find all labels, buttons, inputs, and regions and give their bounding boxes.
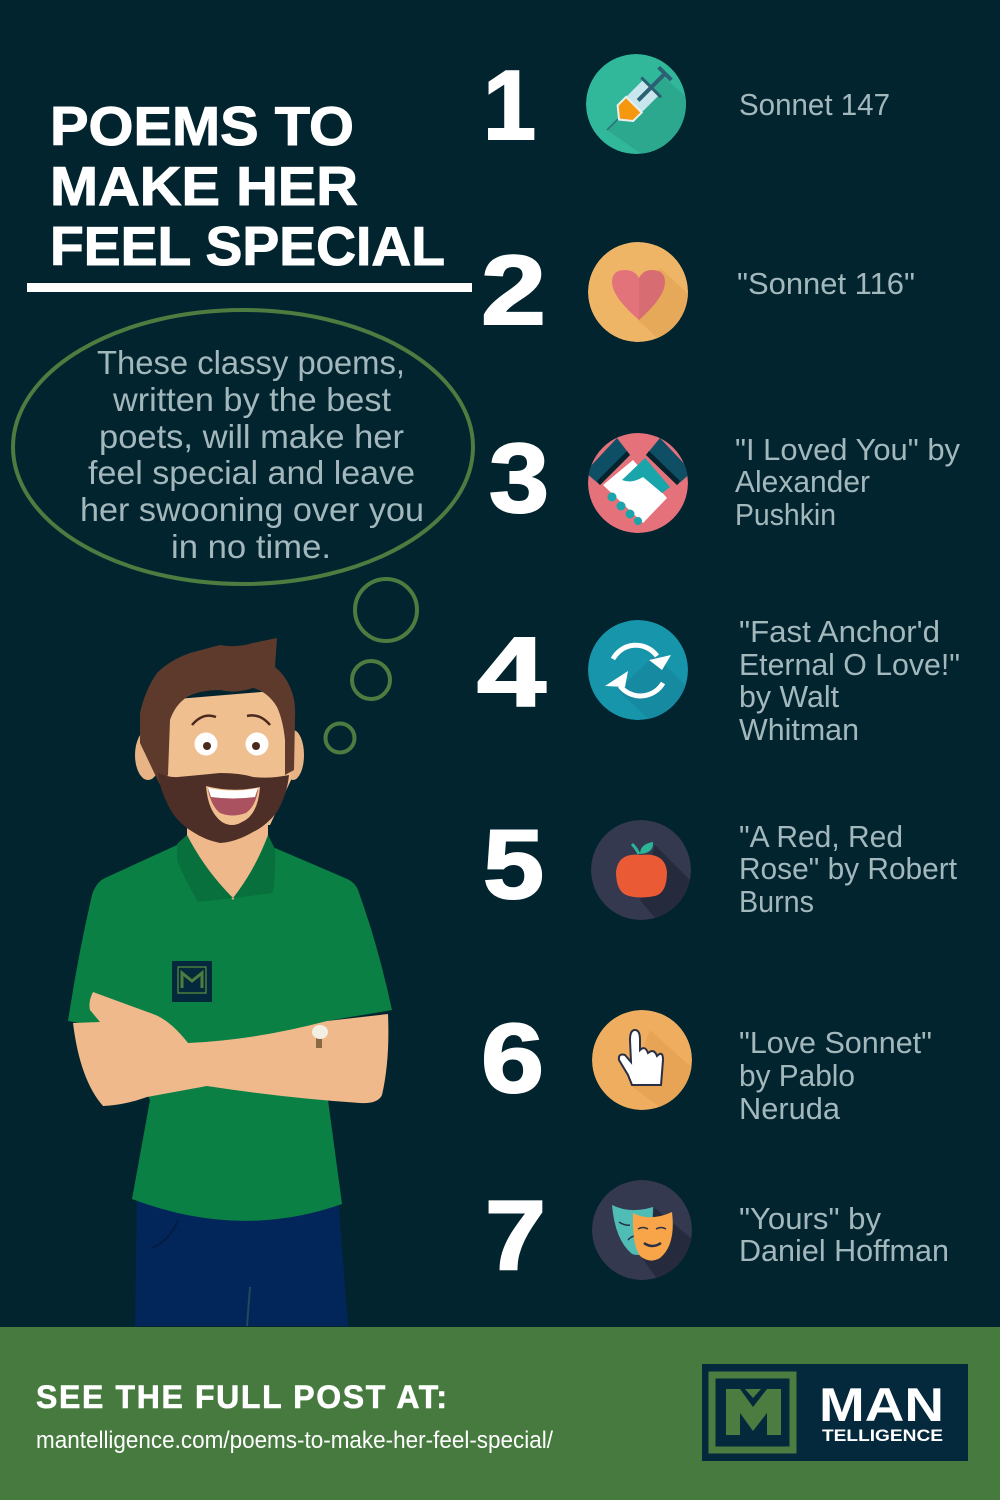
label 7: Daniel Hoffman <box>739 1233 949 1268</box>
title: POEMS TO <box>50 95 354 157</box>
number 4: 4 <box>477 617 546 727</box>
footer heading: SEE THE FULL POST AT: <box>36 1379 447 1415</box>
trousers <box>135 1195 348 1326</box>
logo wordmark: TELLIGENCE <box>822 1427 943 1445</box>
label 3: "I Loved You" by <box>735 432 960 467</box>
bubble text <box>80 344 424 565</box>
number 1: 1 <box>483 50 536 160</box>
label 4 <box>739 614 960 747</box>
mouth <box>206 786 260 825</box>
title: FEEL SPECIAL <box>50 215 445 277</box>
face <box>160 690 291 825</box>
character: bearded man in green polo <box>68 638 392 1326</box>
polo shirt <box>68 845 392 1221</box>
icon: syringe <box>586 54 686 154</box>
neck <box>187 815 268 900</box>
icon: sync arrows <box>588 620 688 720</box>
thought bubble <box>13 310 473 752</box>
label 3: Alexander <box>735 464 870 499</box>
bubble text: in no time. <box>171 528 331 565</box>
label 3: Pushkin <box>735 497 836 532</box>
crossed arms <box>73 992 388 1106</box>
shirt badge <box>172 961 212 1002</box>
bubble text: These classy poems, <box>97 344 405 381</box>
logo mark <box>712 1375 793 1450</box>
label 6: Neruda <box>739 1091 841 1126</box>
title: MAKE HER <box>50 155 358 217</box>
label 7: "Yours" by <box>739 1201 881 1236</box>
collar <box>177 835 275 902</box>
head <box>135 638 304 843</box>
label 6: "Love Sonnet" <box>739 1025 932 1060</box>
label 4: Whitman <box>739 712 859 747</box>
thought circles <box>326 579 417 752</box>
bubble text: feel special and leave <box>88 454 415 491</box>
logo wordmark: MAN <box>819 1378 944 1431</box>
label 2: "Sonnet 116" <box>737 266 915 301</box>
footer url: mantelligence.com/poems-to-make-her-feel-special/ <box>36 1427 553 1454</box>
logo <box>702 1364 968 1461</box>
bubble text: poets, will make her <box>99 418 404 455</box>
footer band <box>0 1327 1000 1500</box>
label 6 <box>739 1025 932 1126</box>
eyes <box>194 732 268 756</box>
label 4: Eternal O Love!" <box>739 647 960 682</box>
list item 7 <box>488 1180 947 1280</box>
hair <box>140 638 295 785</box>
bubble text: her swooning over you <box>80 491 424 528</box>
watch <box>312 1025 328 1048</box>
bubble outline <box>13 310 473 584</box>
bubble text: written by the best <box>112 381 391 418</box>
icon: pointing hand <box>592 1010 692 1110</box>
list item 6 <box>484 1010 931 1120</box>
logo wordmark <box>819 1378 944 1445</box>
label 3 <box>735 432 960 532</box>
list item 1 <box>488 54 889 154</box>
number 3: 3 <box>489 423 549 533</box>
label 6: by Pablo <box>739 1058 855 1093</box>
icon: heart <box>588 242 688 342</box>
number 7: 7 <box>485 1180 546 1290</box>
title underline <box>27 283 472 292</box>
list item 3 <box>489 423 960 533</box>
beard <box>158 773 289 843</box>
icon: apple <box>591 820 691 920</box>
label 5: Burns <box>739 884 814 919</box>
number 5: 5 <box>483 809 544 919</box>
cuffs <box>585 438 692 485</box>
number 6: 6 <box>481 1003 544 1113</box>
label 7 <box>739 1201 949 1268</box>
list item 5 <box>485 820 957 920</box>
label 5 <box>739 819 957 919</box>
icon: handshake <box>585 433 692 533</box>
label 4: by Walt <box>739 679 839 714</box>
eyebrows <box>192 715 270 725</box>
label 5: Rose" by Robert <box>739 851 957 886</box>
number 2: 2 <box>481 235 546 345</box>
label 5: "A Red, Red <box>739 819 903 854</box>
title <box>50 95 445 277</box>
list item 4 <box>477 614 960 747</box>
icon: theatre masks <box>592 1180 692 1280</box>
ears <box>135 730 161 780</box>
label 4: "Fast Anchor'd <box>739 614 940 649</box>
list item 2 <box>484 242 914 342</box>
label 1: Sonnet 147 <box>739 87 890 122</box>
